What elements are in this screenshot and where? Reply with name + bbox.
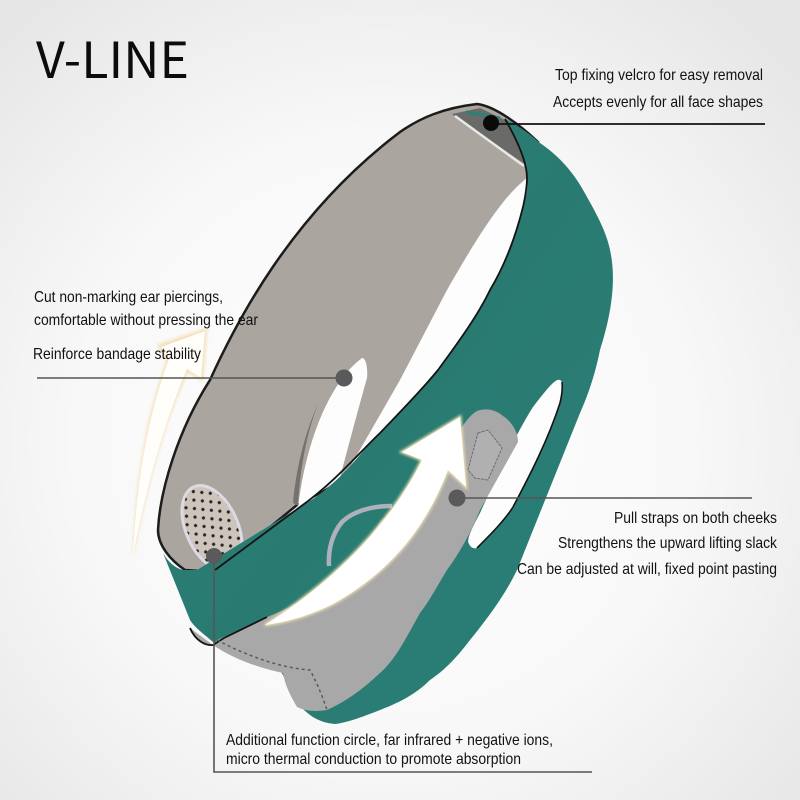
elastic function circle loop	[329, 506, 392, 566]
velcro top tab	[452, 108, 526, 166]
title: V-LINE	[36, 21, 189, 93]
callout: pull straps: Pull straps on both cheeks	[614, 510, 777, 527]
callout: additional function circle: micro thermal conduction to promote absorption	[226, 751, 521, 768]
callout: ear piercings	[33, 289, 352, 386]
chin seam stitching	[217, 640, 327, 710]
mask: teal outer band	[163, 119, 613, 724]
ear cut-out hole	[293, 358, 367, 508]
gap between lining and outer band	[346, 178, 535, 474]
perforated chin patch	[180, 484, 244, 564]
callout: top velcro: Accepts evenly for all face shapes	[553, 94, 763, 111]
callout: ear piercings: Cut non-marking ear piercings,	[34, 289, 223, 306]
callout: top velcro	[483, 67, 765, 131]
callout: pull straps	[448, 490, 778, 578]
arrow: faint upward lift arrow on left	[133, 328, 207, 558]
callout: additional function circle: Additional function circle, far infrared + negative ions,	[226, 732, 553, 749]
band inner edge line	[215, 119, 527, 570]
grey pull strap and chin piece	[190, 409, 518, 711]
callout: ear piercings: Reinforce bandage stability	[33, 346, 201, 363]
right cheek hole	[468, 380, 562, 548]
mask: grey inner lining	[158, 104, 538, 572]
callout: additional function circle	[206, 548, 592, 772]
callout: ear piercings: comfortable without pressing the ear	[34, 312, 259, 329]
strap edge line	[190, 617, 267, 645]
callout: top velcro: Top fixing velcro for easy removal	[555, 67, 763, 84]
square stitched patch	[468, 430, 502, 480]
arrow: white upward curved lift arrow	[265, 417, 466, 625]
